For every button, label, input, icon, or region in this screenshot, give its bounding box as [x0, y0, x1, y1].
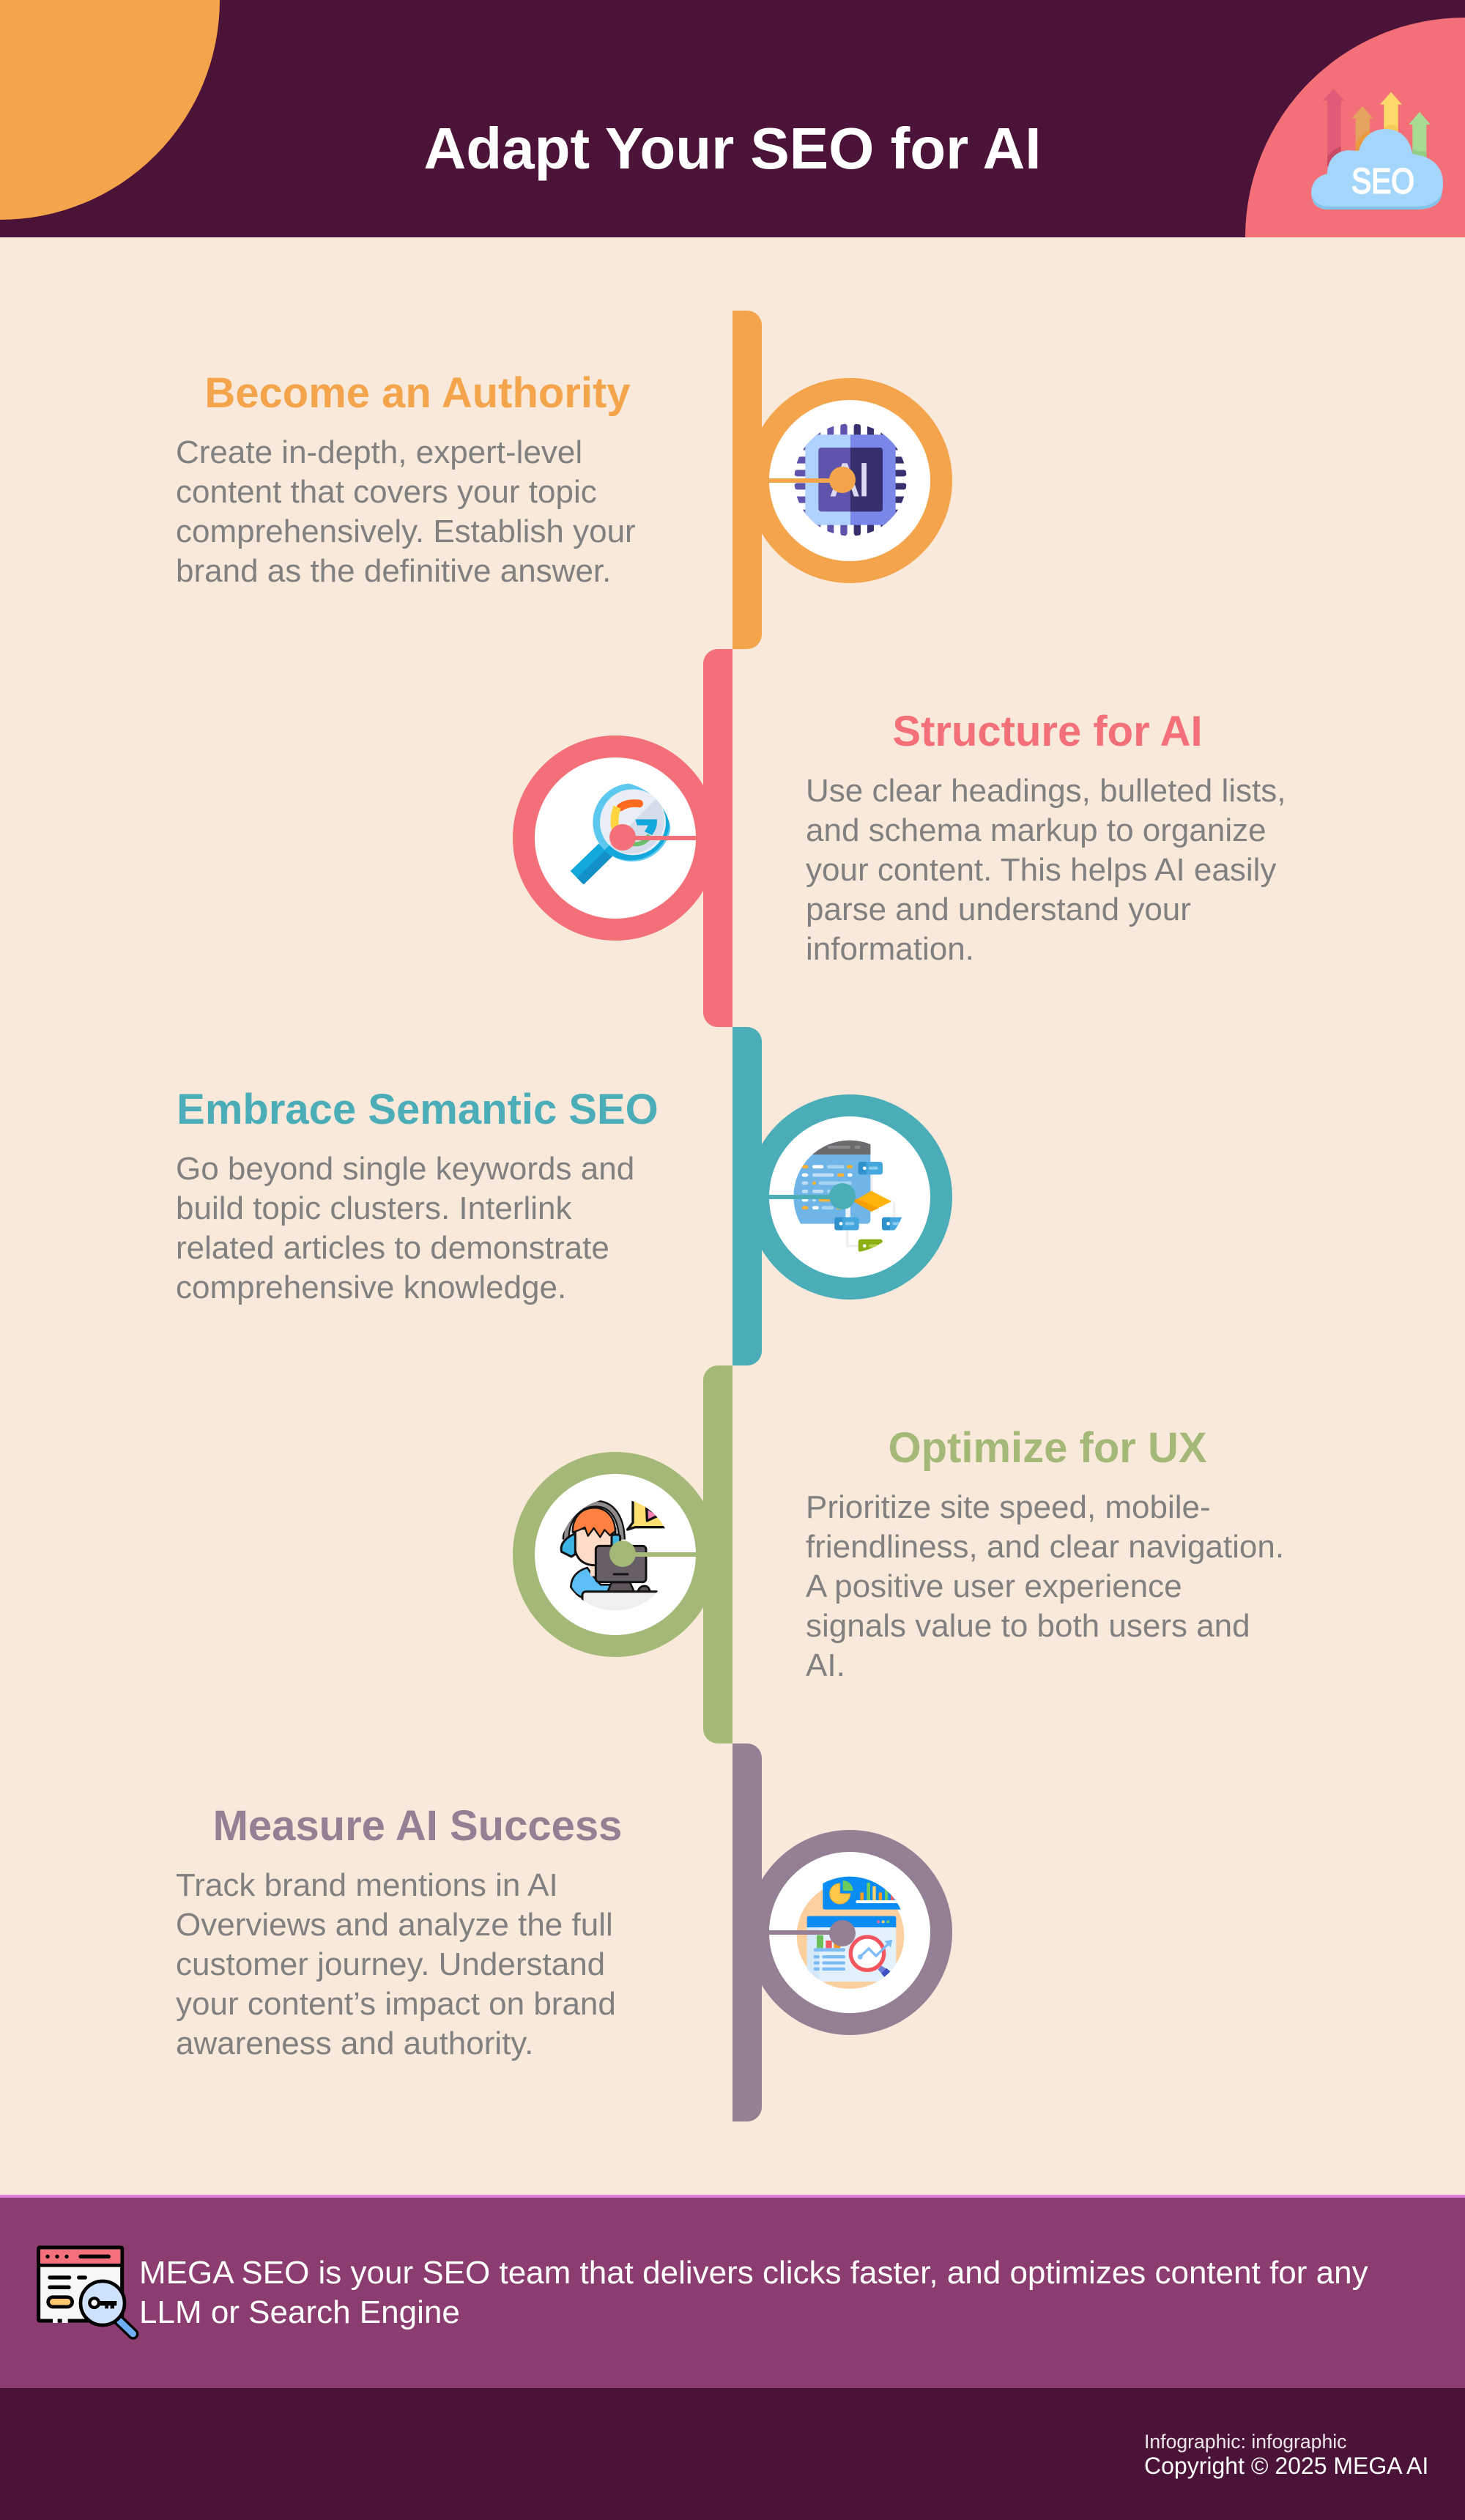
heading: Measure AI Success: [213, 1802, 622, 1850]
ring marker: [758, 1105, 941, 1289]
description: and schema markup to organize: [806, 812, 1266, 848]
icon: AI chip: [794, 423, 907, 536]
step 3: Embrace Semantic SEO: [176, 1027, 941, 1365]
description: [806, 773, 1286, 967]
timeline bar segment: [732, 311, 762, 649]
promo text: LLM or Search Engine: [139, 2294, 460, 2330]
description: build topic clusters. Interlink: [176, 1190, 572, 1226]
icon: support agent at computer: [560, 1500, 665, 1610]
description: brand as the definitive answer.: [176, 553, 611, 589]
icon: browser window with key magnifier: [39, 2247, 133, 2334]
description: [176, 1151, 634, 1305]
description: friendliness, and clear navigation.: [806, 1529, 1284, 1565]
connector line and dot: [609, 1541, 697, 1567]
heading: Optimize for UX: [888, 1424, 1207, 1472]
description: awareness and authority.: [176, 2026, 533, 2061]
credits text: Copyright © 2025 MEGA AI: [1144, 2453, 1428, 2479]
description: customer journey. Understand: [176, 1946, 605, 1982]
timeline bar segment: [732, 1027, 762, 1365]
description: related articles to demonstrate: [176, 1230, 609, 1266]
description: Use clear headings, bulleted lists,: [806, 773, 1286, 809]
timeline bar segment: [703, 1365, 732, 1743]
step 1: Become an Authority: [176, 311, 941, 649]
connector line and dot: [768, 1183, 856, 1209]
description: A positive user experience: [806, 1568, 1182, 1604]
step 5: Measure AI Success: [176, 1743, 941, 2121]
description: [176, 434, 636, 589]
ring marker: [758, 1841, 941, 2024]
description: comprehensively. Establish your: [176, 514, 636, 549]
decorative coral circle: [1245, 18, 1465, 237]
description: signals value to both users and: [806, 1608, 1250, 1644]
ring marker: [758, 389, 941, 572]
heading: Become an Authority: [204, 369, 631, 417]
description: Track brand mentions in AI: [176, 1867, 558, 1903]
promo band: [0, 2195, 1465, 2388]
description: your content’s impact on brand: [176, 1986, 616, 2022]
credits text: [1144, 2431, 1428, 2479]
title: Adapt Your SEO for AI: [423, 116, 1042, 181]
timeline bar segment: [703, 649, 732, 1027]
heading: Structure for AI: [892, 708, 1203, 755]
description: information.: [806, 931, 974, 967]
description: content that covers your topic: [176, 474, 597, 510]
heading: Embrace Semantic SEO: [177, 1086, 659, 1133]
icon: SEO cloud with arrows: [1311, 89, 1443, 210]
header banner: [0, 0, 1465, 237]
step 2: Structure for AI: [524, 649, 1286, 1027]
description: comprehensive knowledge.: [176, 1270, 566, 1305]
ring marker: [524, 1463, 707, 1646]
description: Create in-depth, expert-level: [176, 434, 582, 470]
footer band: [0, 2388, 1465, 2520]
decorative orange circle: [0, 0, 220, 220]
icon: AI chip: AI: [831, 455, 869, 506]
step 4: Optimize for UX: [524, 1365, 1284, 1743]
icon: analytics dashboard: [797, 1875, 908, 1990]
credits text: Infographic: infographic: [1144, 2431, 1346, 2453]
description: your content. This helps AI easily: [806, 852, 1276, 888]
icon: SEO cloud with arrows: SEO: [1351, 162, 1414, 201]
description: Overviews and analyze the full: [176, 1907, 613, 1943]
description: AI.: [806, 1648, 845, 1683]
promo text: MEGA SEO is your SEO team that delivers clicks faster, and optimizes content for any: [139, 2255, 1368, 2291]
ring marker: [524, 746, 707, 930]
description: Prioritize site speed, mobile-: [806, 1489, 1211, 1525]
connector line and dot: [768, 1920, 856, 1946]
description: [176, 1867, 616, 2061]
connector line and dot: [609, 824, 697, 850]
icon: Google magnifier: [571, 783, 671, 885]
description: [806, 1489, 1284, 1683]
timeline bar segment: [732, 1743, 762, 2121]
description: Go beyond single keywords and: [176, 1151, 634, 1187]
connector line and dot: [768, 467, 856, 493]
promo text: [139, 2255, 1368, 2330]
description: parse and understand your: [806, 892, 1191, 927]
icon: code window and site structure: [791, 1140, 906, 1252]
